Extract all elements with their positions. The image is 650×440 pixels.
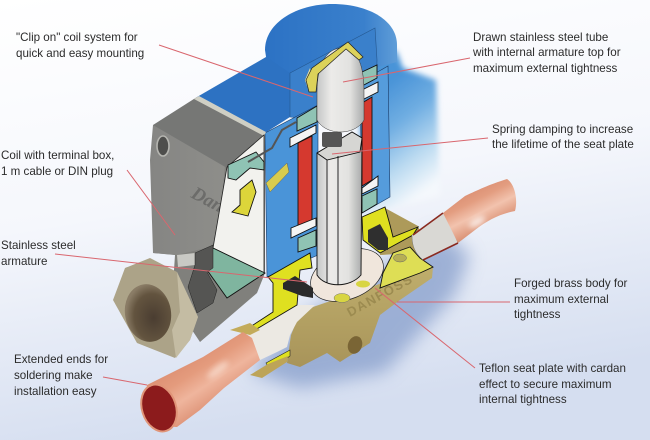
black connector left — [283, 276, 313, 298]
right yellow top section — [362, 207, 418, 253]
lower brass collar — [250, 356, 288, 378]
label: drawn tube: with internal armature top for — [472, 46, 621, 59]
terminal yellow part — [232, 180, 256, 216]
drop shadow of valve — [250, 230, 470, 388]
brass upper back — [380, 208, 428, 255]
label: armature: armature — [1, 255, 47, 268]
seat disc — [303, 239, 391, 311]
nut body — [113, 258, 198, 358]
label: teflon seat: effect to secure maximum — [479, 378, 612, 391]
clear cavity — [247, 305, 315, 360]
port hole — [345, 334, 365, 356]
right yellow lower section — [380, 247, 433, 288]
label: clip on coil: quick and easy mounting — [16, 47, 144, 60]
light teeth section — [177, 253, 195, 267]
coil wire — [248, 122, 296, 162]
label: forged brass: tightness — [514, 308, 561, 321]
pipe edge lines — [413, 213, 458, 260]
coil right faded side — [360, 40, 440, 215]
copper pipe — [147, 332, 260, 427]
coil top surface — [197, 57, 290, 133]
label: drawn tube: maximum external tightness — [473, 62, 618, 75]
yellow hole near — [334, 294, 350, 302]
coil right section — [360, 66, 390, 213]
armature top cylinder — [317, 48, 364, 132]
label: terminal box: 1 m cable or DIN plug — [1, 165, 113, 178]
solenoid coil — [197, 4, 440, 277]
left yellow section — [250, 253, 312, 333]
upper brass collar — [230, 323, 260, 335]
valve body — [247, 207, 433, 367]
box top face — [153, 97, 265, 168]
coil left section — [265, 105, 318, 277]
coil interior back — [290, 28, 377, 120]
leader lines — [55, 45, 510, 385]
terminal cut-away — [213, 135, 264, 273]
label: clip on coil: "Clip on" coil system for — [16, 31, 138, 44]
label: terminal box: Coil with terminal box, — [1, 149, 114, 162]
armature connector — [177, 245, 217, 313]
brass main body — [287, 267, 433, 367]
pipe mouth — [135, 380, 183, 436]
copper pipe — [443, 179, 516, 243]
hex nut — [113, 258, 198, 358]
highlight — [467, 214, 487, 230]
hex tube — [317, 132, 362, 285]
label: extended ends: installation easy — [14, 385, 97, 398]
cream tab of clip — [305, 68, 314, 92]
yellow hole far — [356, 280, 370, 288]
label: extended ends: Extended ends for — [14, 353, 108, 366]
label: spring damping: the lifetime of the seat plate — [492, 138, 634, 151]
box top light rim — [194, 96, 266, 136]
label: armature: Stainless steel — [1, 239, 76, 252]
clear sleeve — [412, 212, 458, 260]
label: forged brass: maximum external — [514, 293, 609, 306]
grey jaws — [188, 245, 217, 313]
teal gasket — [207, 248, 265, 298]
box lower body — [153, 125, 265, 342]
connector green block — [228, 152, 264, 180]
box shaded face — [150, 125, 225, 255]
label: spring damping: Spring damping to increase — [492, 123, 633, 136]
yellow screw — [266, 163, 289, 192]
black connector right — [368, 224, 388, 250]
pipe highlight — [205, 359, 231, 381]
label: teflon seat: Teflon seat plate with cardan — [479, 362, 626, 375]
hex top — [317, 132, 362, 160]
brass lettering: DANFOSS — [344, 271, 416, 320]
label: drawn tube: Drawn stainless steel tube — [473, 31, 608, 44]
spring — [322, 132, 342, 147]
screw — [157, 136, 169, 156]
label: extended ends: soldering make — [14, 369, 93, 382]
nut bright edge — [172, 272, 198, 358]
label: forged brass: Forged brass body for — [514, 277, 628, 290]
nut bore — [120, 280, 176, 346]
armature tube — [305, 42, 364, 285]
red winding right — [362, 97, 372, 186]
red winding left — [298, 136, 312, 226]
right copper tube — [412, 179, 516, 260]
lower yellow collar — [266, 350, 290, 370]
coil seals — [290, 65, 378, 252]
coil cap — [265, 4, 397, 90]
terminal box — [150, 96, 296, 342]
label: teflon seat: internal tightness — [479, 393, 567, 406]
yellow clip — [306, 42, 363, 92]
logo script on box: Dan — [187, 182, 227, 217]
left copper tube — [135, 323, 290, 436]
